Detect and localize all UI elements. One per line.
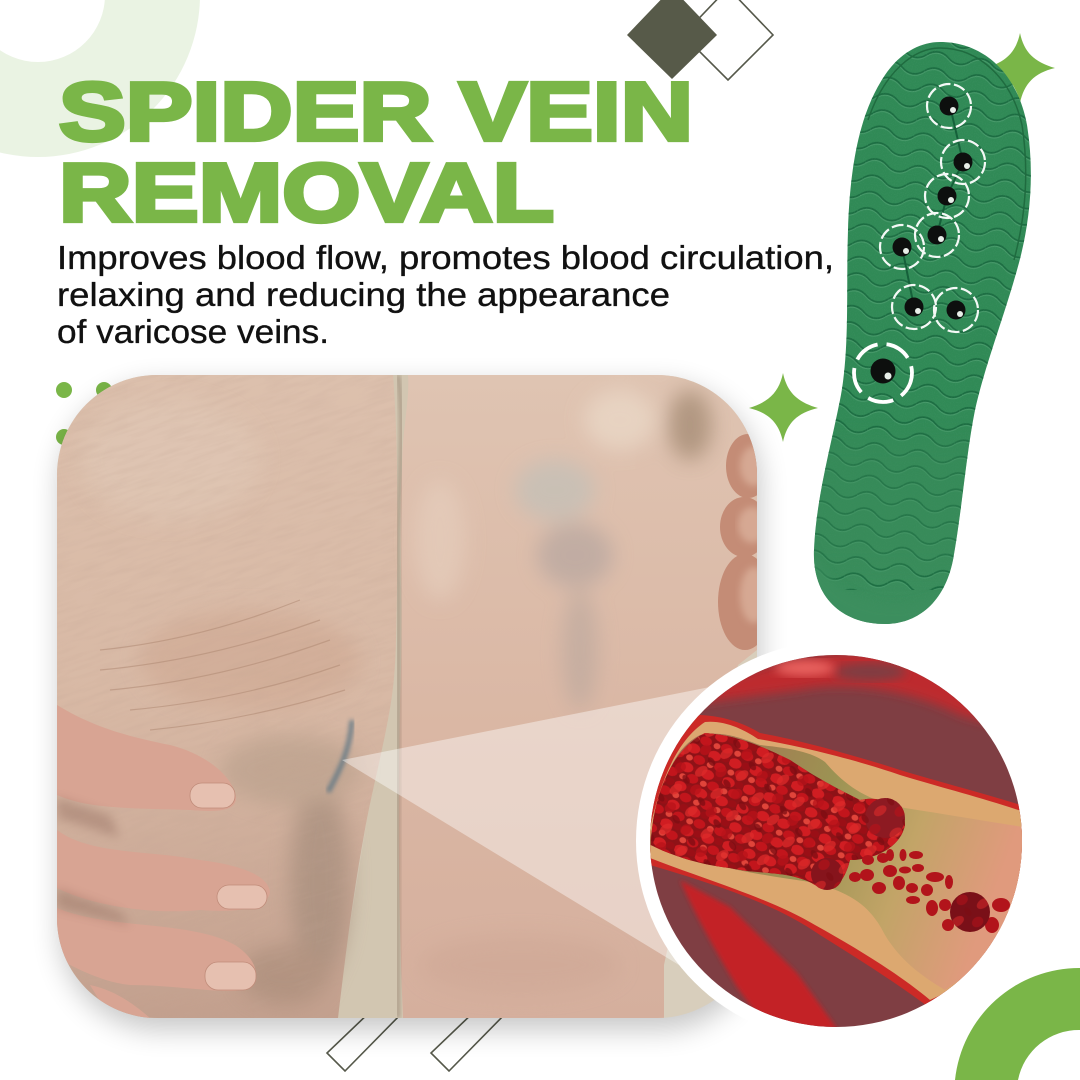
blood clot lower (811, 858, 843, 890)
background vessel bottom (680, 880, 838, 1030)
outline shapes below photo (327, 1010, 509, 1071)
zoom callout beam (342, 685, 720, 990)
description text (57, 239, 834, 350)
skin wrinkle texture (57, 266, 397, 1076)
outline diamond top (683, 0, 773, 80)
background vessel top (707, 655, 982, 727)
icon: sparkle star left of insole (749, 373, 818, 442)
connecting lines (902, 106, 963, 307)
description text: of varicose veins. (57, 313, 329, 350)
finger shading (57, 797, 130, 925)
right leg (399, 375, 757, 1018)
gap between legs (335, 375, 412, 1018)
description text: relaxing and reducing the appearance (57, 276, 670, 313)
insole product (814, 42, 1031, 624)
title: SPIDER VEIN (59, 65, 693, 158)
plaque layer (645, 722, 1030, 1000)
skin tone patches (80, 390, 712, 1005)
loose red cells (849, 849, 1010, 933)
title (59, 65, 693, 239)
background ring top-left (0, 0, 200, 157)
corner ring bottom-right (955, 968, 1080, 1080)
fingernails (190, 783, 267, 990)
description text: Improves blood flow, promotes blood circulation, (57, 239, 834, 276)
dashed highlight circles (880, 84, 985, 332)
left hand fingers (57, 705, 270, 1018)
blood clot upper (865, 798, 905, 838)
artery lumen (650, 734, 1030, 990)
filled diamond top (627, 0, 717, 79)
magnified artery illustration (640, 652, 1030, 1030)
artery outer wall (640, 715, 1030, 1012)
blood clot right (950, 892, 990, 932)
vein mark (328, 720, 352, 792)
right hand fingers (718, 434, 757, 650)
red blood cell mass (651, 733, 905, 888)
icon: sparkle star right of insole (985, 33, 1055, 103)
acupressure magnets (870, 96, 972, 384)
left leg (57, 375, 398, 1018)
wrinkles (100, 600, 345, 730)
photo: legs with varicose veins (57, 375, 757, 1018)
title: REMOVAL (59, 146, 554, 239)
magnifier circle border (636, 641, 1036, 1041)
decorative dots (56, 382, 112, 445)
leg crease shadow (398, 375, 401, 1018)
photo shadow (60, 385, 760, 1030)
